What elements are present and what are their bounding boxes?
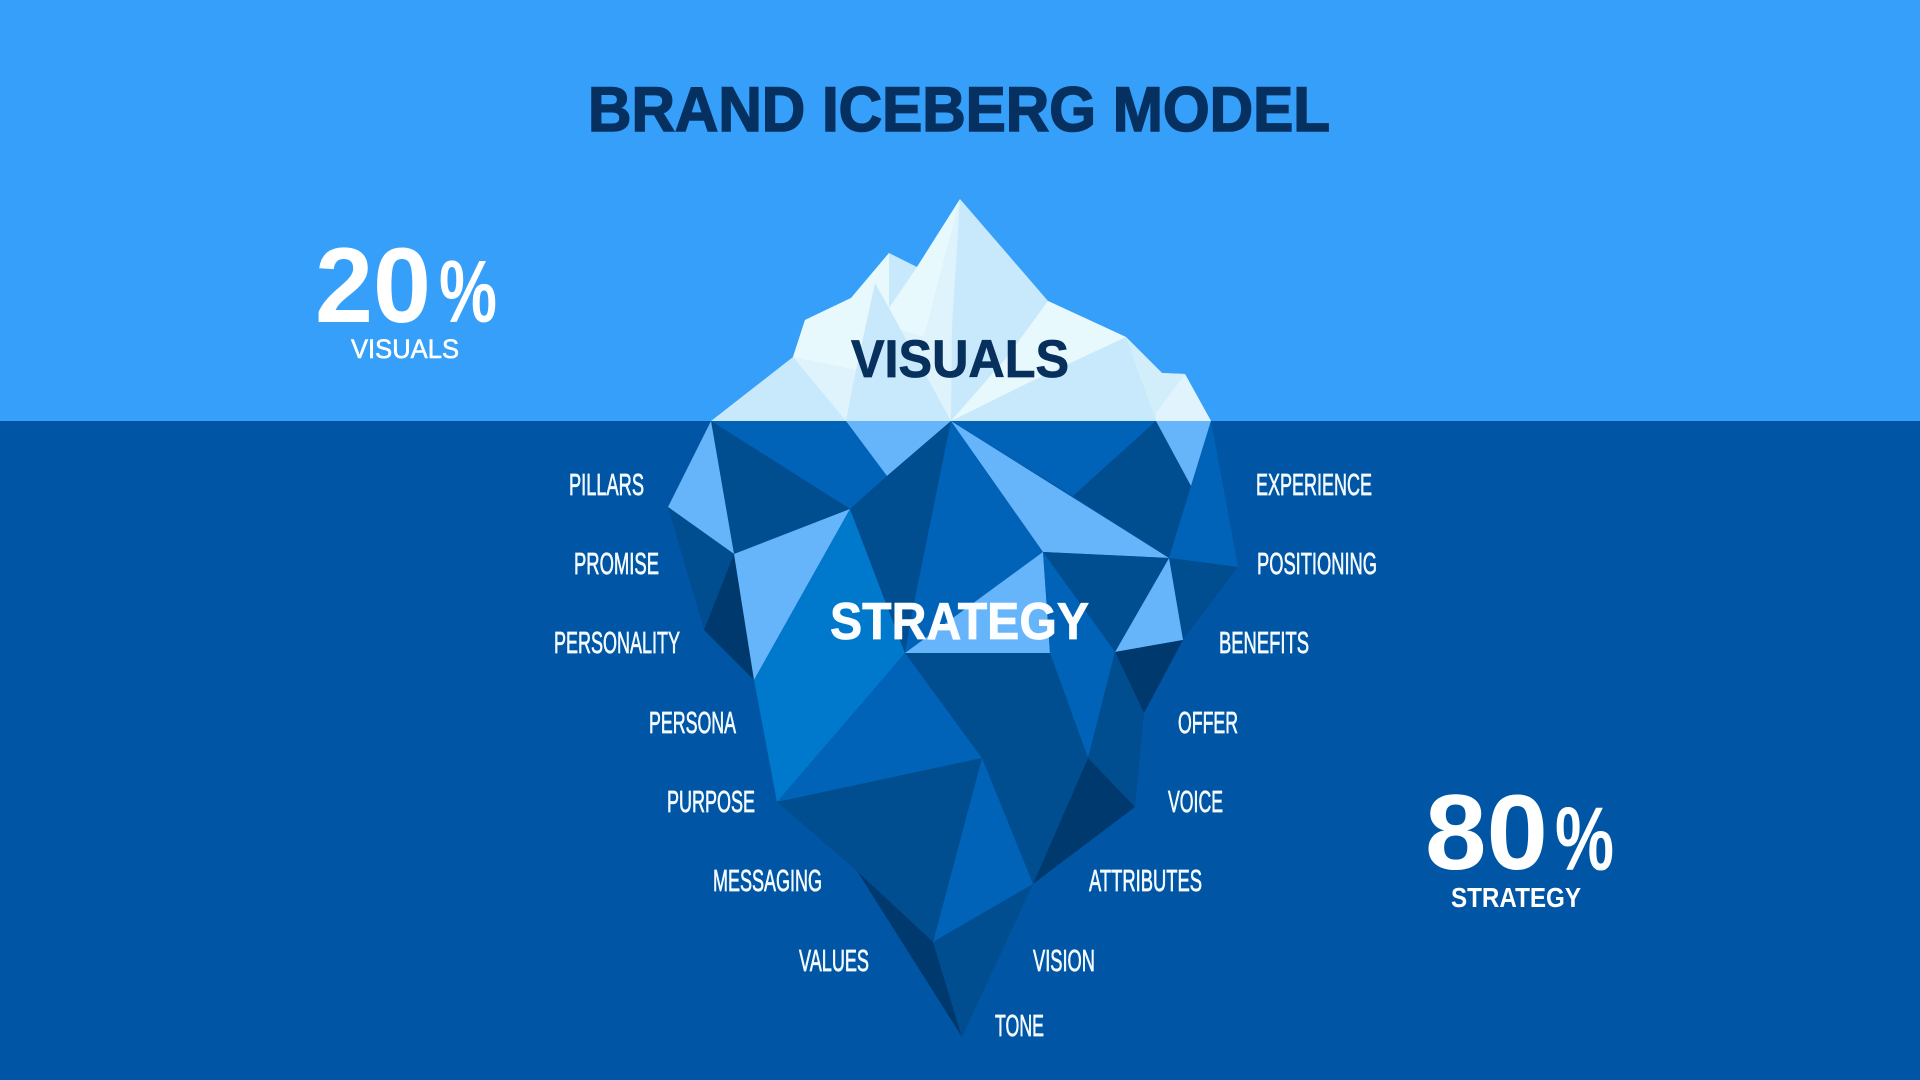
iceberg label: visuals: VISUALS: [851, 330, 1069, 389]
labels: left column: PILLARS: [569, 468, 644, 502]
labels: right column: TONE: [995, 1009, 1044, 1043]
iceberg label: strategy: STRATEGY: [830, 593, 1089, 651]
sky background: [0, 0, 1920, 421]
stat: 20% visuals: VISUALS: [351, 334, 459, 364]
stat: 20% visuals: [315, 225, 497, 364]
water background: [0, 421, 1920, 1080]
iceberg: above water: [711, 199, 1211, 421]
labels: right column: ATTRIBUTES: [1089, 864, 1202, 898]
labels: left column: PROMISE: [574, 547, 659, 581]
labels: left column: PERSONA: [649, 706, 736, 740]
iceberg: below water: [668, 421, 1238, 1037]
labels: left column: VALUES: [799, 944, 869, 978]
title: BRAND ICEBERG MODEL: [588, 75, 1330, 145]
labels: right column: VOICE: [1168, 785, 1223, 819]
labels: left column: MESSAGING: [713, 864, 822, 898]
stat: 20% visuals: %: [439, 242, 497, 341]
labels: right column: BENEFITS: [1219, 626, 1309, 660]
labels: right column: VISION: [1033, 944, 1095, 978]
labels: right column: OFFER: [1178, 706, 1238, 740]
labels: right column: POSITIONING: [1257, 547, 1377, 581]
stat: 80% strategy: STRATEGY: [1451, 882, 1581, 913]
labels: left column: [554, 468, 869, 978]
stat: 80% strategy: %: [1555, 790, 1614, 890]
stat: 80% strategy: [1425, 772, 1614, 913]
labels: right column: [995, 468, 1377, 1043]
stat: 80% strategy: 80: [1425, 772, 1548, 892]
labels: left column: PURPOSE: [667, 785, 755, 819]
labels: right column: EXPERIENCE: [1256, 468, 1372, 502]
stat: 20% visuals: 20: [315, 225, 431, 345]
labels: left column: PERSONALITY: [554, 626, 680, 660]
